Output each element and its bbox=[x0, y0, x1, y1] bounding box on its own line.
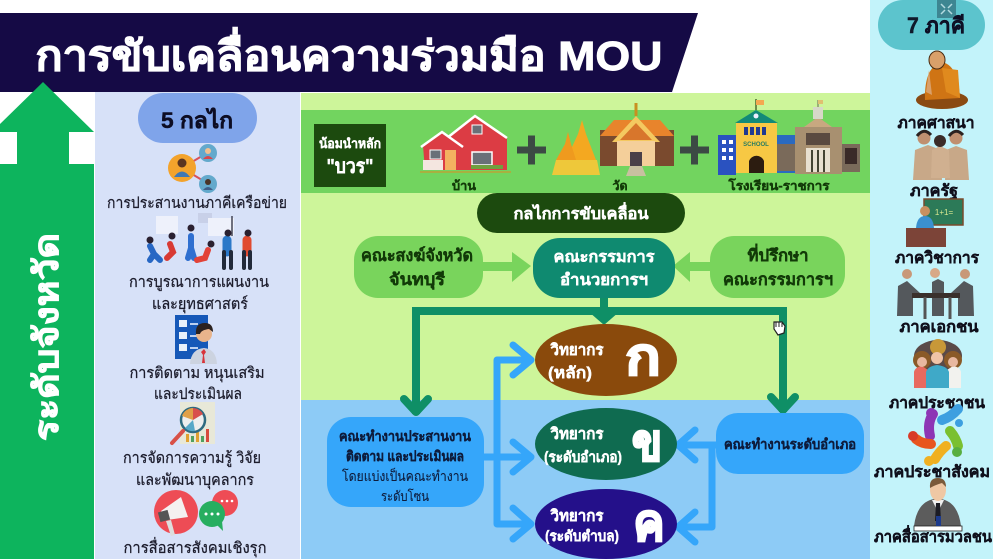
arrows: committee distribution bbox=[404, 296, 795, 414]
box: provincial sangha: คณะสงฆ์จังหวัด bbox=[361, 246, 473, 265]
icon: plus bbox=[680, 136, 709, 164]
box: zone working group: คณะทำงานประสานงาน bbox=[339, 428, 471, 444]
icon: plus bbox=[517, 136, 546, 164]
icon: monitoring checklist bbox=[175, 315, 217, 364]
icon: house bbox=[420, 116, 511, 173]
heading: driving mechanism: กลไกการขับเคลื่อน bbox=[514, 202, 649, 223]
label: people sector: ภาคประชาชน bbox=[889, 395, 985, 412]
arrow: advisers to committee bbox=[673, 252, 710, 282]
icon: teacher at board: 1+1= bbox=[935, 208, 953, 217]
icon: news anchor bbox=[914, 478, 962, 531]
box: advisers: คณะกรรมการฯ bbox=[723, 271, 833, 289]
box: provincial sangha: จันทบุรี bbox=[389, 270, 445, 290]
label: state sector: ภาครัฐ bbox=[910, 182, 958, 201]
icon: analysis magnifier bbox=[172, 402, 215, 444]
panel: seven sectors bbox=[870, 0, 993, 559]
node: main trainers bbox=[535, 324, 677, 396]
icon: school and government building: SCHOOL bbox=[743, 142, 769, 148]
label: private sector: ภาคเอกชน bbox=[900, 319, 979, 336]
box: provincial sangha bbox=[354, 236, 483, 298]
icon: crowd of people bbox=[913, 339, 962, 388]
label: knowledge management line 2: และพัฒนาบุคลากร bbox=[136, 472, 254, 490]
box: advisers: ที่ปรึกษา bbox=[748, 243, 808, 265]
node: district trainers: (ระดับอำเภอ) bbox=[544, 449, 622, 466]
node: district trainers: วิทยากร bbox=[550, 425, 604, 443]
label: proactive social communication: การสื่อสารสังคมเชิงรุก bbox=[124, 537, 266, 558]
heading: 5 mechanisms: 5 กลไก bbox=[161, 107, 233, 133]
label: home: บ้าน bbox=[452, 179, 476, 193]
label box: bowon principle bbox=[314, 124, 386, 187]
box: zone working group: ติดตาม และประเมินผล bbox=[346, 448, 464, 464]
node: district trainers: ข bbox=[632, 415, 662, 471]
icon: temple bbox=[552, 103, 674, 176]
label: school and government: โรงเรียน-ราชการ bbox=[727, 178, 830, 193]
node: subdistrict trainers: (ระดับตำบล) bbox=[545, 528, 619, 545]
title banner: การขับเคลื่อนความร่วมมือ MOU bbox=[36, 27, 662, 79]
icon: monk bbox=[916, 51, 968, 109]
icon: civil society ring bbox=[908, 408, 963, 466]
node: district trainers bbox=[535, 408, 677, 480]
box: steering committee: อำนวยการฯ bbox=[560, 271, 648, 289]
box: district working group: คณะทำงานระดับอำเภอ bbox=[724, 436, 856, 452]
arrow: sangha to committee bbox=[483, 252, 531, 282]
heading: 7 sectors bbox=[878, 0, 985, 50]
node: main trainers: (หลัก) bbox=[548, 365, 592, 382]
title banner bbox=[0, 13, 698, 92]
label: plan integration: การบูรณาการแผนงาน bbox=[129, 274, 269, 292]
panel: provincial level arrow: ระดับจังหวัด bbox=[28, 233, 66, 441]
node: subdistrict trainers: วิทยากร bbox=[550, 507, 604, 525]
box: advisers bbox=[710, 236, 845, 298]
label: monitoring line 2: และประเมินผล bbox=[154, 386, 242, 403]
box: zone working group: โดยแบ่งเป็นคณะทำงาน bbox=[342, 467, 468, 484]
node: subdistrict trainers: ค bbox=[634, 495, 664, 551]
icon: teacher at board bbox=[906, 199, 963, 247]
node: main trainers: วิทยากร bbox=[550, 341, 604, 359]
panel: provincial level arrow bbox=[0, 82, 94, 559]
label: religion sector: ภาคศาสนา bbox=[898, 115, 974, 132]
label box: bowon principle: น้อมนำหลัก bbox=[319, 136, 381, 151]
label: knowledge management: การจัดการความรู้ วิจัย bbox=[123, 450, 261, 468]
icon: network bbox=[168, 144, 217, 193]
label: monitoring: การติดตาม หนุนเสริม bbox=[130, 365, 264, 383]
box: steering committee: คณะกรรมการ bbox=[554, 249, 655, 266]
label: network coordination: การประสานงานภาคีเครือข่าย bbox=[107, 194, 287, 212]
icon: hand cursor bbox=[774, 322, 785, 335]
label: academic sector: ภาควิชาการ bbox=[895, 249, 979, 267]
icon: megaphone and chat bbox=[154, 490, 238, 536]
box: zone working group: ระดับโซน bbox=[381, 488, 429, 504]
node: subdistrict trainers bbox=[535, 489, 677, 559]
icon: school and government building bbox=[718, 99, 860, 175]
box: district working group bbox=[716, 413, 864, 474]
label: civil society sector: ภาคประชาสังคม bbox=[874, 463, 990, 481]
panel: main flow background bbox=[301, 93, 870, 559]
panel: five mechanisms bbox=[95, 92, 300, 559]
icon: planning team bbox=[146, 213, 252, 268]
panel: bowon strip bbox=[301, 99, 870, 193]
icon: business meeting bbox=[897, 268, 974, 319]
label: plan integration line 2: และยุทธศาสตร์ bbox=[152, 295, 248, 314]
heading: 7 sectors: 7 ภาคี bbox=[907, 13, 965, 38]
box: steering committee bbox=[533, 238, 675, 298]
box: zone working group bbox=[327, 417, 484, 507]
heading: 5 mechanisms bbox=[138, 93, 257, 143]
node: main trainers: ก bbox=[626, 329, 660, 385]
arrows: blue connectors bbox=[484, 345, 716, 542]
label: temple: วัด bbox=[612, 179, 628, 193]
heading: driving mechanism bbox=[477, 193, 685, 233]
label box: bowon principle: "บวร" bbox=[326, 156, 374, 178]
icon: government officers bbox=[913, 131, 969, 180]
